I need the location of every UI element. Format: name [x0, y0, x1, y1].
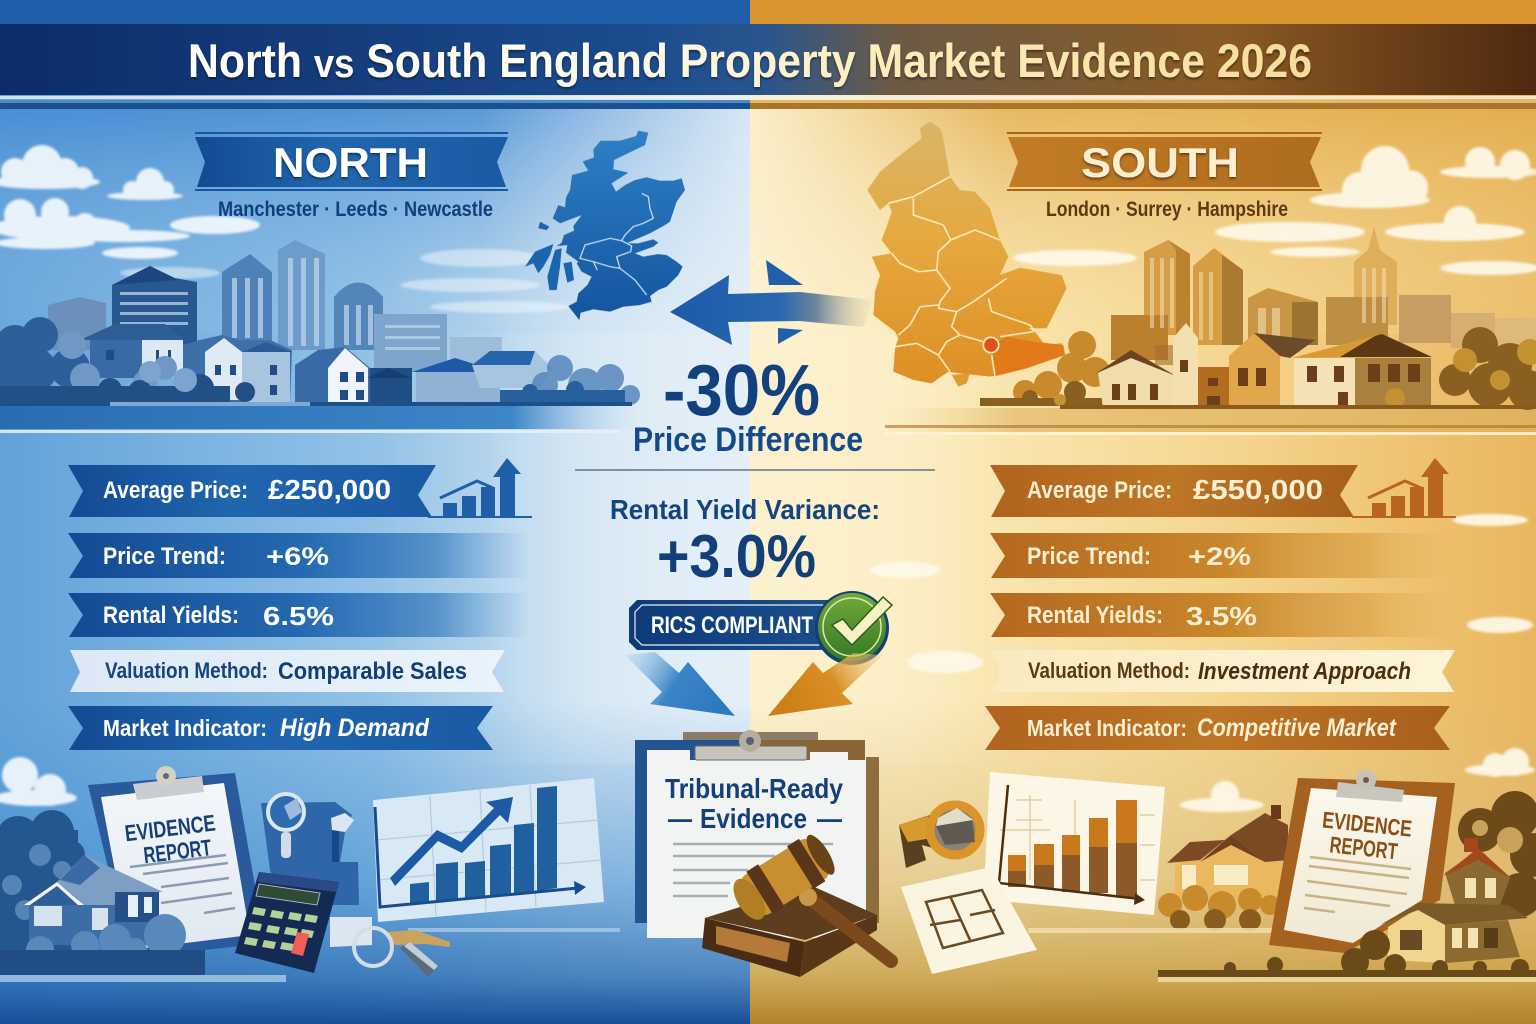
row: market indicator: [68, 706, 493, 750]
row: rental yields: [68, 593, 530, 637]
chart: north sketch: [373, 778, 620, 932]
row: valuation method: Investment Approach: [1198, 658, 1411, 685]
row: price trend: [990, 533, 1460, 578]
stat: price difference: -30%: [663, 351, 820, 431]
clipboard: north evidence report: REPORT: [142, 834, 213, 868]
row: market indicator: [985, 706, 1450, 750]
badge: RICS compliant: [629, 591, 892, 665]
north skyline: [0, 240, 640, 433]
trees: south right: [1455, 791, 1536, 917]
row: valuation method: Valuation Method:: [1028, 658, 1190, 683]
row: price trend: Price Trend:: [1027, 543, 1151, 570]
row: rental yields: 6.5%: [263, 601, 334, 631]
clouds south: [870, 146, 1536, 812]
row: valuation method: [70, 650, 505, 692]
panel: south metrics: [985, 458, 1460, 750]
icon: tape measure: [899, 805, 980, 868]
stat: rental yield variance: [610, 494, 880, 590]
clipboard: south evidence report: EVIDENCE: [1321, 806, 1413, 842]
row: market indicator: Market Indicator:: [1027, 715, 1187, 741]
row: average price: [68, 465, 436, 517]
icon: calculator: [235, 872, 339, 973]
row: valuation method: [990, 650, 1455, 692]
clipboard: north evidence report: [88, 766, 262, 958]
row: price trend: +2%: [1188, 543, 1251, 571]
clipboard: tribunal-ready evidence: Tribunal-Ready: [665, 773, 843, 804]
icon: check mark: [815, 591, 892, 665]
map: north: [525, 131, 685, 320]
title banner: [0, 24, 1536, 109]
arrow: between regions: [670, 260, 873, 345]
title text: North vs South England Property Market Evidence 2026: [188, 34, 1312, 87]
clipboard: tribunal-ready evidence: —: [817, 803, 842, 834]
row: valuation method: Comparable Sales: [278, 658, 467, 685]
row: average price: [990, 465, 1358, 517]
row: price trend: Price Trend:: [103, 543, 226, 570]
stat: rental yield variance: Rental Yield Variance:: [610, 494, 880, 525]
heading: south: SOUTH: [1081, 139, 1239, 186]
divider: [575, 469, 935, 471]
stat: price difference: [633, 351, 863, 459]
clipboard: south evidence report: [1269, 770, 1455, 953]
heading: south: [1007, 132, 1322, 191]
row: rental yields: [990, 593, 1460, 637]
clipboard: tribunal-ready evidence: [635, 730, 879, 938]
panel: north metrics: [68, 458, 532, 750]
row: valuation method: Valuation Method:: [105, 658, 268, 683]
row: rental yields: Rental Yields:: [103, 602, 239, 629]
clipboard: tribunal-ready evidence: Evidence: [700, 803, 807, 834]
arrow: north to evidence: [625, 652, 735, 716]
row: rental yields: 3.5%: [1186, 601, 1257, 631]
south skyline: [885, 227, 1536, 435]
house and bushes: south: [1028, 805, 1288, 933]
clipboard: tribunal-ready evidence: —: [668, 803, 692, 834]
house backdrop and magnifier: [261, 794, 359, 905]
row: average price: £250,000: [268, 474, 391, 505]
stat: rental yield variance: +3.0%: [657, 523, 816, 590]
clouds north: [0, 145, 570, 806]
clipboard: north evidence report: EVIDENCE: [123, 809, 217, 846]
badge: RICS compliant: RICS COMPLIANT: [651, 612, 813, 639]
heading: north: NORTH: [273, 139, 428, 186]
arrow: south to evidence: [768, 653, 883, 716]
stat: price difference: Price Difference: [633, 421, 863, 459]
row: average price: £550,000: [1193, 474, 1323, 505]
chart: south sketch: [985, 772, 1165, 915]
row: rental yields: Rental Yields:: [1027, 602, 1163, 629]
top colour strip: [0, 0, 1536, 24]
heading: north: [195, 132, 508, 191]
row: price trend: +6%: [266, 543, 329, 571]
icon: keys: [330, 917, 450, 977]
foreground trees: north: [0, 810, 85, 973]
icon: gavel: [702, 829, 891, 977]
house: north: [0, 855, 286, 982]
clipboard: south evidence report: REPORT: [1329, 831, 1399, 864]
icon: trend chart: [428, 458, 532, 518]
icon: floor plan: [901, 867, 1037, 974]
row: average price: Average Price:: [1027, 477, 1172, 504]
map: south: [867, 122, 1067, 387]
icon: trend chart: [1352, 458, 1456, 518]
row: market indicator: Market Indicator:: [103, 715, 267, 741]
north cities: Manchester · Leeds · Newcastle: [218, 198, 493, 221]
row: market indicator: Competitive Market: [1197, 714, 1397, 742]
row: price trend: [68, 533, 530, 578]
row: average price: Average Price:: [103, 477, 248, 504]
house: south: [1158, 838, 1536, 982]
south cities: London · Surrey · Hampshire: [1046, 198, 1288, 221]
row: market indicator: High Demand: [280, 714, 430, 742]
